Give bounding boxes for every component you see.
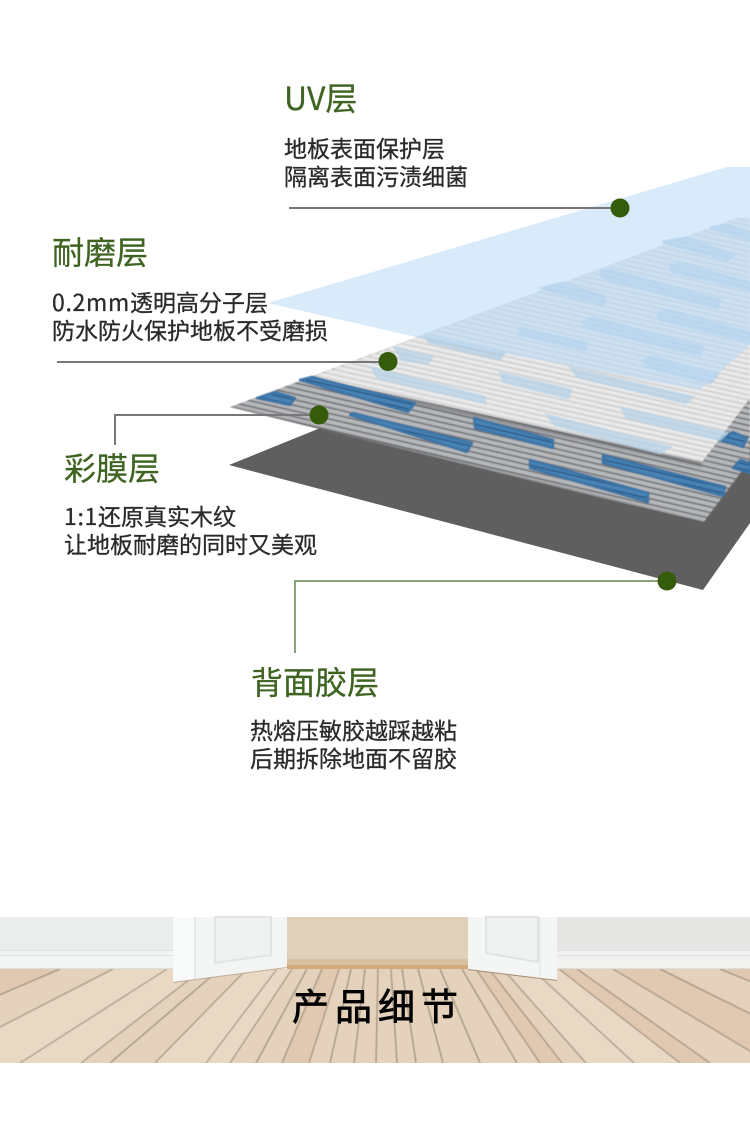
heading: backing adhesive layer: 背面胶层 — [251, 658, 379, 704]
text: UV layer description: 地板表面保护层 — [284, 130, 445, 164]
text: colour film description: 1:1还原真实木纹 — [64, 498, 236, 532]
callout line and dot: backing adhesive layer — [295, 572, 676, 653]
text: colour film description — [64, 498, 317, 560]
backing adhesive layer sheet — [229, 420, 750, 590]
callout line and dot: colour film layer — [115, 406, 328, 445]
heading: UV layer: UV层 — [284, 74, 357, 120]
left door — [173, 917, 287, 982]
text: backing adhesive description: 热熔压敏胶越踩越粘 — [250, 712, 457, 746]
text: backing adhesive description — [250, 712, 457, 774]
text: wear layer description: 0.2mm透明高分子层 — [52, 284, 268, 318]
banner title: 产品细节 — [292, 977, 464, 1031]
heading: colour film layer: 彩膜层 — [64, 444, 160, 490]
right door — [468, 917, 557, 980]
callout line and dot: UV layer — [289, 198, 630, 218]
heading: wear layer: 耐磨层 — [52, 228, 148, 274]
UV layer sheet — [268, 167, 750, 390]
callout line and dot: wear layer — [57, 352, 398, 371]
text: wear layer description: 防水防火保护地板不受磨损 — [52, 312, 328, 346]
text: UV layer description — [284, 130, 468, 192]
text: backing adhesive description: 后期拆除地面不留胶 — [250, 740, 457, 774]
banner photo: room with open doors and wood floor — [0, 917, 750, 1063]
text: colour film description: 让地板耐磨的同时又美观 — [64, 526, 317, 560]
text: UV layer description: 隔离表面污渍细菌 — [284, 158, 468, 192]
colour film and wear layer stack — [230, 218, 750, 525]
text: wear layer description — [52, 284, 328, 346]
